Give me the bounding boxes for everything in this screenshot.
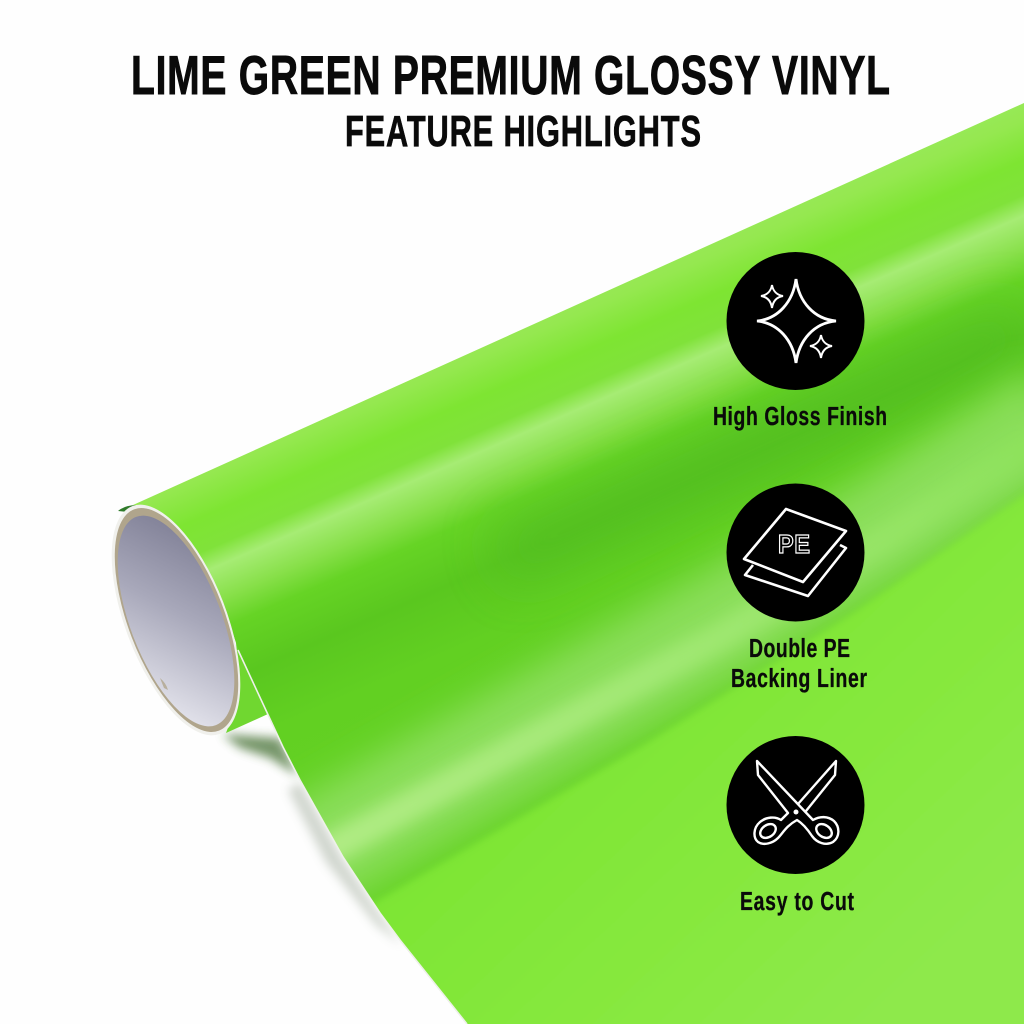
dark band — [576, 322, 985, 512]
cast shadow — [222, 734, 402, 945]
title — [131, 46, 890, 156]
icon: scissors — [726, 736, 864, 874]
title: LIME GREEN PREMIUM GLOSSY VINYL — [131, 46, 890, 107]
rear green wrap — [226, 640, 268, 733]
core interior — [94, 501, 258, 741]
label: Backing Liner — [731, 664, 867, 693]
feature: double PE backing liner — [726, 484, 867, 693]
icon: PE sheets — [726, 484, 864, 622]
lower highlight glow — [290, 415, 1024, 866]
outer white rim — [85, 488, 267, 752]
core tube — [85, 488, 267, 752]
icon: sparkles — [726, 252, 864, 390]
label: Easy to Cut — [740, 887, 854, 916]
cardboard ring — [89, 492, 264, 748]
label: High Gloss Finish — [713, 402, 887, 431]
label: Double PE — [749, 634, 850, 663]
feature: easy to cut — [726, 736, 864, 916]
lower highlight core — [327, 504, 942, 864]
lower sheet surface — [340, 470, 1024, 1024]
icon: PE sheets: PE — [778, 531, 810, 559]
subtitle: FEATURE HIGHLIGHTS — [345, 108, 701, 156]
dark edge sliver — [118, 505, 137, 512]
label — [731, 634, 867, 693]
torn core patch — [160, 678, 168, 690]
feature: high gloss finish — [713, 252, 887, 431]
sheet white edge — [238, 650, 467, 1024]
